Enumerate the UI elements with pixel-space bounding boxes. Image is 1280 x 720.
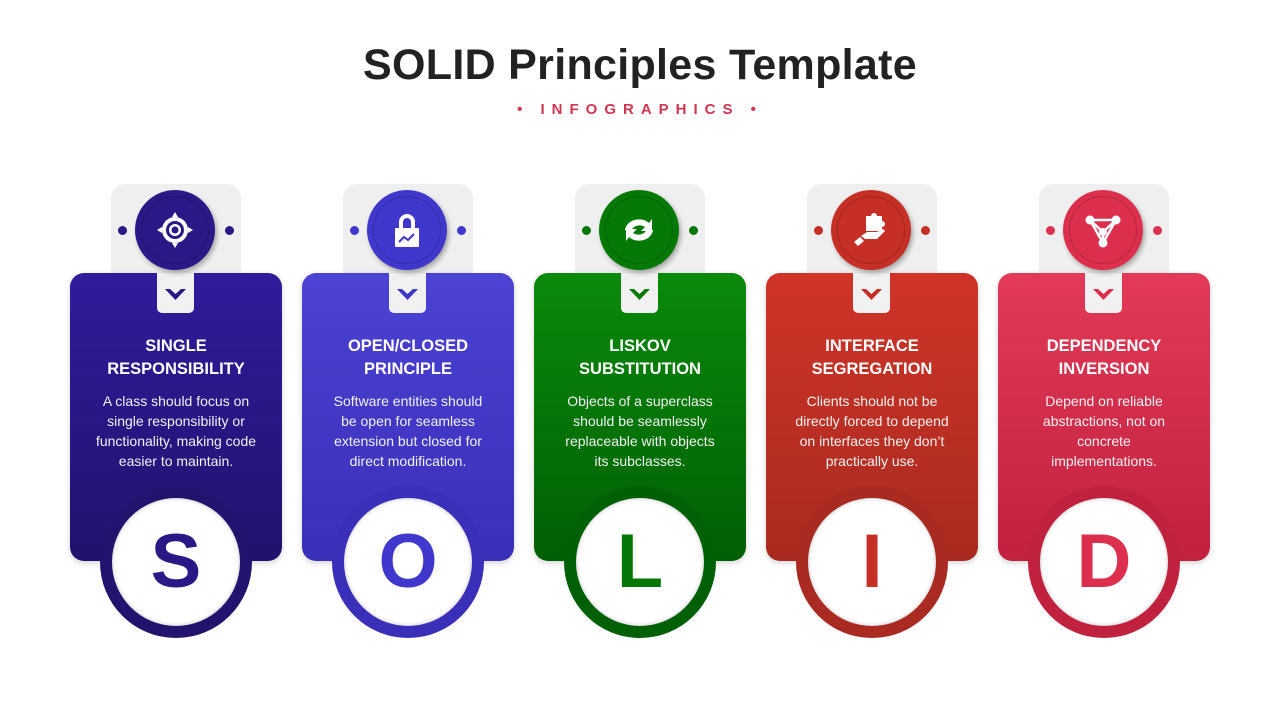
panel: interface segregation: SEGREGATION [812,360,932,378]
panel: open/closed [300,184,516,638]
letter D [1028,486,1180,638]
panel: single responsibility: A class should focus on [103,393,249,409]
icon: lock [367,190,447,270]
panel: liskov: should be seamlessly [573,413,707,429]
panel: open/closed: OPEN/CLOSED [348,337,468,355]
icon: refresh [599,190,679,270]
letter I [796,486,948,638]
panel: open/closed: PRINCIPLE [364,360,452,378]
letter S: S [151,519,201,604]
panel: interface segregation: practically use. [826,453,918,469]
panel: interface segregation: INTERFACE [825,337,919,355]
panel: dependency inversion: abstractions, not on [1043,413,1165,429]
letter L [564,486,716,638]
letter D: D [1077,519,1131,604]
panel: dependency inversion: DEPENDENCY [1047,337,1161,355]
icon: hand with puzzle [831,190,911,270]
icon: target [135,190,215,270]
panel: single responsibility [68,184,284,638]
panel: open/closed: direct modification. [350,453,466,469]
panel: interface segregation [764,184,980,638]
letter I: I [861,519,883,604]
panel: liskov: its subclasses. [594,453,686,469]
letter O: O [378,519,438,604]
subtitle: • INFOGRAPHICS • [517,101,763,118]
panel: dependency inversion: implementations. [1051,453,1157,469]
panel: single responsibility: functionality, making code [96,433,256,449]
panel: single responsibility: RESPONSIBILITY [107,360,245,378]
panel: single responsibility: easier to maintain. [119,453,233,469]
panel: dependency inversion: concrete [1077,433,1131,449]
panel: interface segregation: Clients should not be [807,393,937,409]
panel: open/closed: extension but closed for [334,433,482,449]
panel: dependency inversion: Depend on reliable [1045,393,1163,409]
panel: liskov: Objects of a superclass [567,393,713,409]
panel: dependency inversion: INVERSION [1059,360,1149,378]
panel: single responsibility: SINGLE [145,337,207,355]
panel: interface segregation: directly forced to depend [795,413,949,429]
title: SOLID Principles Template [363,41,917,89]
panel: liskov [532,184,748,638]
panel: single responsibility: single responsibility or [107,413,245,429]
letter S [100,486,252,638]
panel: dependency inversion [996,184,1212,638]
panel: liskov: replaceable with objects [565,433,715,449]
panel: liskov: LISKOV [609,337,671,355]
icon: network [1063,190,1143,270]
panel: open/closed: be open for seamless [341,413,475,429]
letter O [332,486,484,638]
letter L: L [617,519,663,604]
panel: open/closed: Software entities should [334,393,482,409]
panel: liskov: SUBSTITUTION [579,360,701,378]
panel: interface segregation: on interfaces they don’t [800,433,944,449]
